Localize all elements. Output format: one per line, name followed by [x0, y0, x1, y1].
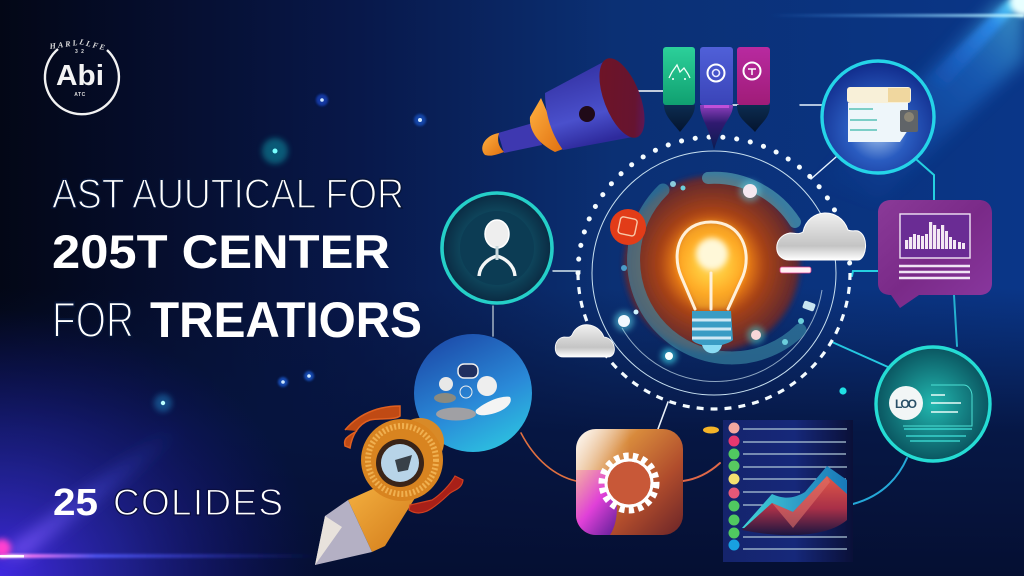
title: 205T CENTER [52, 225, 390, 278]
marker card: blue [700, 47, 733, 150]
logo badge: ATC [74, 92, 86, 98]
star dots [154, 94, 426, 412]
cloud left [555, 325, 614, 357]
pink bar [780, 267, 811, 273]
circle: document [822, 61, 934, 173]
marker card: magenta [737, 47, 770, 132]
marker card: green [663, 47, 695, 132]
red badge [610, 209, 646, 245]
glow disc [624, 176, 800, 352]
dotted outer ring [578, 137, 850, 409]
logo badge: LLFE [78, 37, 106, 52]
chart areas [742, 466, 847, 530]
circle: logo card [876, 347, 990, 461]
title: FOR [52, 292, 134, 348]
title: TREATIORS [150, 292, 422, 348]
logo badge: Abi [56, 60, 104, 92]
glowing nodes [614, 180, 804, 364]
cloud right [777, 213, 866, 260]
row lines [743, 429, 847, 549]
logo badge: 3 2 [75, 49, 85, 55]
subtitle count: COLIDES [113, 482, 283, 523]
thin rings [592, 151, 836, 395]
circle: logo card: LOO [895, 397, 917, 411]
small tag [802, 300, 816, 312]
central ring diagram [578, 137, 850, 409]
subtitle count: 25 [53, 482, 98, 524]
teal band [634, 190, 800, 358]
teal band upper right [708, 178, 795, 222]
title: AST AUUTICAL FOR [52, 170, 404, 217]
logo badge: HARL [48, 38, 78, 51]
circle: person [442, 193, 552, 303]
row markers [728, 422, 740, 550]
light bulb [677, 222, 746, 353]
speech card: bar chart [878, 200, 992, 308]
title [52, 170, 422, 348]
pencil with lens [315, 406, 463, 565]
cyan dot [839, 387, 847, 395]
connector lines [493, 91, 957, 504]
tile: gear [576, 429, 683, 535]
circle: team [414, 334, 532, 452]
telescope icon [482, 52, 654, 156]
logo badge [45, 37, 119, 114]
yellow blob [703, 426, 719, 434]
line and area chart [723, 420, 853, 562]
